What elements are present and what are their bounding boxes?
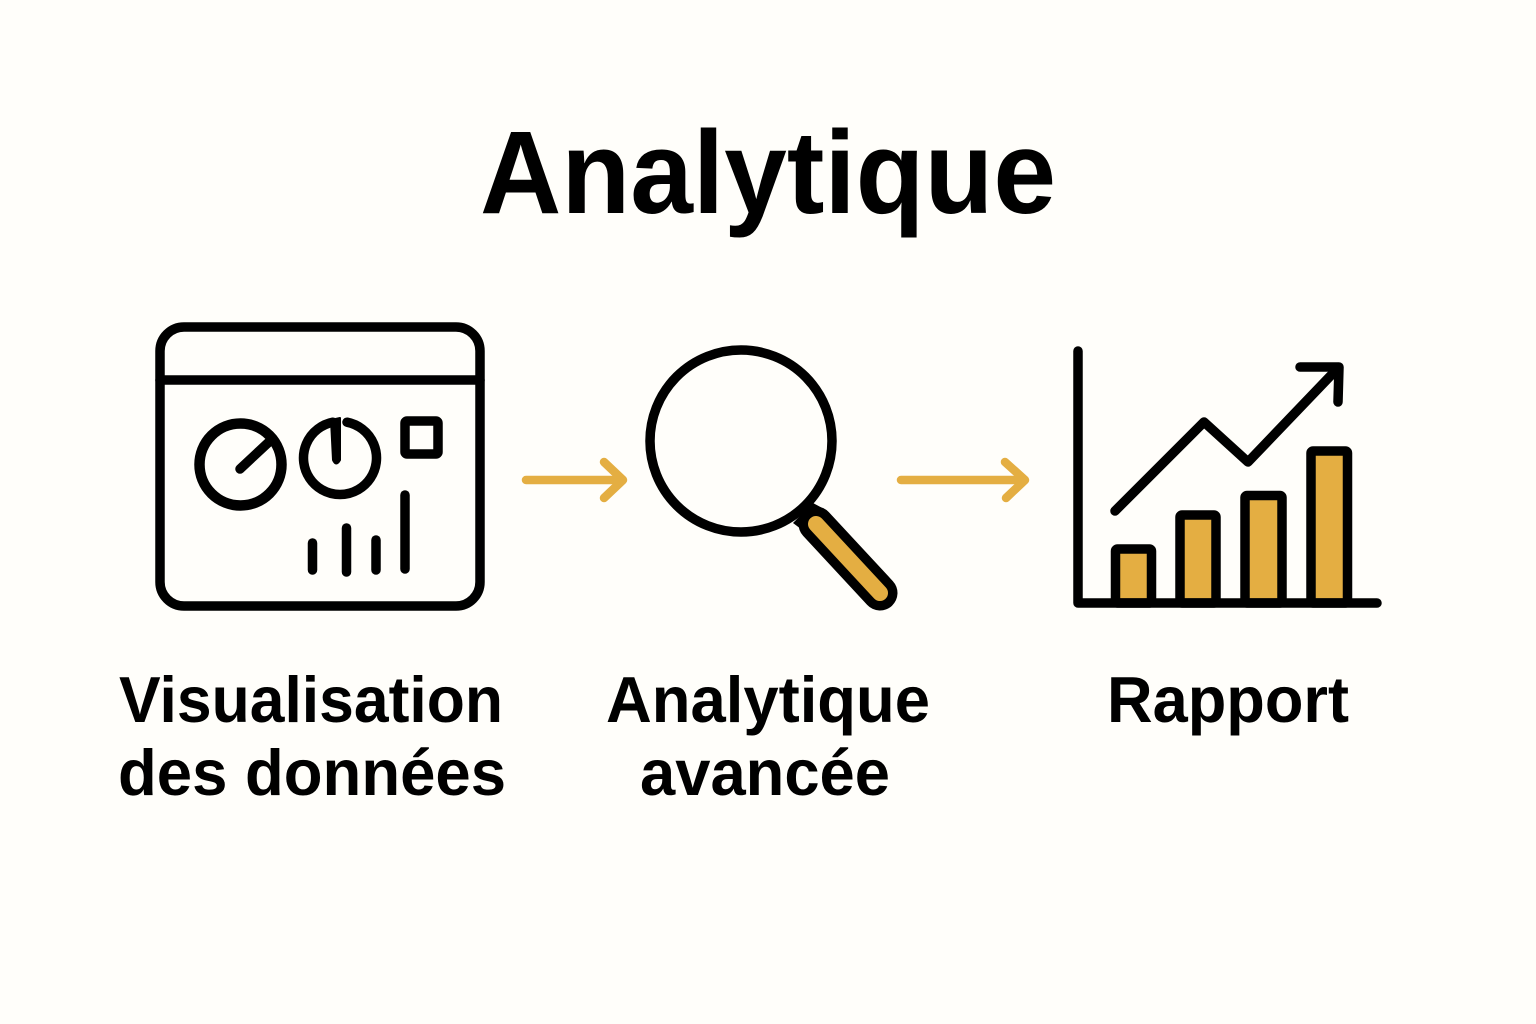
chart bars: [1116, 451, 1348, 603]
arrow: magnifier to report: [901, 462, 1025, 498]
label: advanced analytics: [606, 663, 930, 809]
icon: small square: [405, 421, 438, 454]
icon: left gauge: [200, 424, 282, 506]
icon: growth chart: [1078, 351, 1377, 603]
icon: right gauge: [303, 418, 376, 495]
label: report: Rapport: [1107, 663, 1349, 736]
label: data visualisation: des données: [118, 736, 506, 809]
label: data visualisation: [118, 663, 506, 809]
title: Analytique: [480, 107, 1056, 239]
chart axes: [1078, 351, 1377, 603]
icon: dashboard window: [160, 327, 480, 606]
icon: small bars: [312, 495, 405, 572]
trend arrow: [1115, 367, 1339, 511]
label: advanced analytics: avancée: [640, 736, 890, 809]
icon: magnifying glass: [650, 350, 880, 593]
label: advanced analytics: Analytique: [606, 663, 930, 736]
arrow: dashboard to magnifier: [526, 462, 623, 498]
label: data visualisation: Visualisation: [119, 663, 503, 736]
